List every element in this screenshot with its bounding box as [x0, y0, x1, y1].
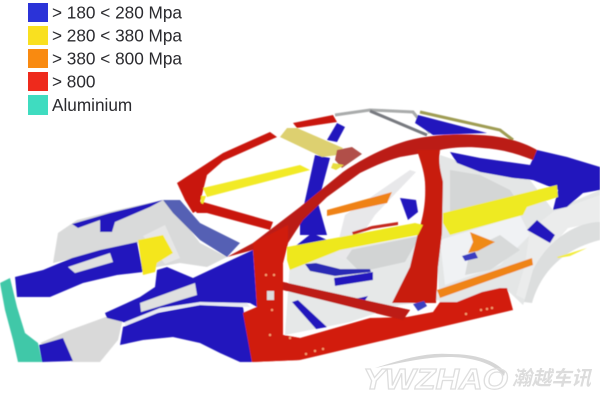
red hinge — [243, 225, 300, 362]
orange lower rail — [437, 258, 533, 298]
roof blue panel — [415, 115, 487, 135]
strut top panel — [72, 200, 163, 232]
legend — [28, 2, 182, 115]
crash can lower — [39, 338, 73, 362]
blue patch in B-pillar base — [413, 301, 427, 311]
watermark car outline — [375, 354, 505, 376]
windscreen header and pillar — [177, 132, 277, 213]
grey plate on hinge — [267, 291, 274, 300]
yellow rear crossmember — [443, 185, 558, 235]
front upper rail — [15, 242, 143, 297]
weld holes — [265, 274, 493, 355]
yellow upper crossmember — [203, 165, 310, 197]
roof rails — [335, 110, 513, 140]
legend: > 280 < 380 Mpa — [52, 26, 182, 46]
yellow front panel — [138, 235, 173, 275]
aluminium crash beam — [0, 278, 42, 362]
watermark text: YWZHAO — [363, 364, 508, 396]
floor parts — [305, 263, 371, 276]
grey floor and rear structure — [285, 155, 600, 335]
upper fender panel — [105, 250, 257, 323]
watermark — [363, 354, 593, 396]
orange bracket — [468, 232, 495, 253]
legend: > 380 < 800 Mpa — [52, 48, 182, 68]
yellow khaki brace — [280, 128, 343, 157]
red high-strength structure — [177, 115, 537, 362]
rear quarter — [450, 150, 600, 210]
grey front structure — [40, 200, 227, 362]
lower arch panel — [120, 305, 252, 362]
yellow wheel arch detail — [557, 248, 587, 258]
main roof arc and A-pillar — [227, 134, 537, 362]
door diagonal bar — [283, 282, 410, 320]
orange crossmember — [327, 192, 392, 216]
windscreen lower bar — [185, 200, 273, 230]
car body structure — [0, 110, 600, 362]
yellow front crossmember — [287, 223, 423, 270]
legend: Aluminium — [52, 95, 132, 115]
door diagonal bar, upper layer — [283, 282, 410, 320]
blue panels — [15, 115, 600, 362]
red sill — [252, 288, 513, 362]
legend: > 180 < 280 Mpa — [52, 2, 182, 22]
red inner rail — [352, 222, 398, 235]
A-pillar trim, grey blue — [163, 200, 240, 257]
legend: > 800 — [52, 72, 96, 92]
watermark chinese: 瀚越车讯 — [512, 367, 593, 390]
white highlights on front panels — [68, 253, 250, 326]
centre pillar — [327, 123, 345, 142]
brown gusset — [335, 147, 362, 168]
B-pillar — [392, 150, 443, 303]
